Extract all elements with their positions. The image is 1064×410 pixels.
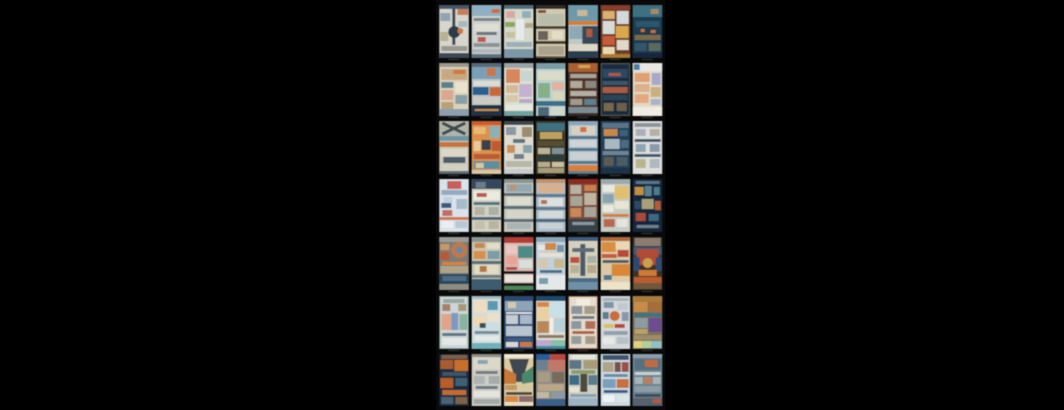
thumbnail r7c3: cream funnel poster bbox=[504, 354, 534, 406]
thumbnail r6c5: cream rust framed poster bbox=[568, 296, 598, 351]
thumbnail r2c4: blue-green map poster bbox=[536, 63, 566, 118]
thumbnail r6c7: brown teal purple poster bbox=[633, 296, 662, 351]
thumbnail r1c7: navy poster bbox=[633, 5, 662, 60]
thumbnail r5c7: red blue orange emblem poster bbox=[633, 237, 662, 292]
thumbnail r7c2: light grey map poster bbox=[472, 354, 501, 406]
thumbnail r5c1: circle diagram poster bbox=[439, 237, 469, 292]
thumbnail r2c5: brown sunset poster bbox=[568, 63, 598, 118]
thumbnail r3c3: white with dark header poster bbox=[504, 121, 534, 176]
thumbnail r7c6: white-blue with navy top poster bbox=[601, 354, 630, 406]
thumbnail r5c4: light blue flow poster bbox=[536, 237, 566, 292]
thumbnail r6c4: blue top orange and purple poster bbox=[536, 296, 566, 351]
thumbnail r1c1: dark circle centre poster bbox=[439, 5, 469, 60]
thumbnail r3c1: crossed map poster bbox=[439, 121, 469, 176]
thumbnail r4c1: white-blue with red centre poster bbox=[439, 179, 469, 234]
thumbnail r4c5: rust poster bbox=[568, 179, 598, 234]
thumbnail r7c5: teal and blue base poster bbox=[568, 354, 598, 406]
thumbnail r4c2: navy header poster bbox=[472, 179, 501, 234]
thumbnail r1c6: red framed poster bbox=[601, 5, 630, 60]
thumbnail r4c7: dark navy spotted poster bbox=[633, 179, 662, 234]
thumbnail r3c5: light blue with orange base poster bbox=[568, 121, 598, 176]
thumbnail r2c6: dark navy with sunset bands poster bbox=[601, 63, 630, 118]
thumbnail r2c7: cream peach cells poster bbox=[633, 63, 662, 118]
thumbnail r3c6: navy with orange map poster bbox=[601, 121, 630, 176]
thumbnail r7c4: flag colours poster bbox=[536, 354, 566, 406]
thumbnail r6c6: white with orange hub poster bbox=[601, 296, 630, 351]
thumbnail r4c4: blue-grey with orange top poster bbox=[536, 179, 566, 234]
thumbnail r3c4: dark olive framed poster bbox=[536, 121, 566, 176]
thumbnail r4c3: grey-cream bands poster bbox=[504, 179, 534, 234]
thumbnail r6c2: pale blue and peach map poster bbox=[472, 296, 501, 351]
thumbnail r3c7: white with blue cells poster bbox=[633, 121, 662, 176]
thumbnail r1c3: pale cells poster bbox=[504, 5, 534, 60]
thumbnail r1c4: cream with dark bands poster bbox=[536, 5, 566, 60]
thumbnail r1c2: map and grey bands poster bbox=[472, 5, 501, 60]
thumbnail r2c1: cream tan map poster bbox=[439, 63, 469, 118]
thumbnail r3c2: orange poster bbox=[472, 121, 501, 176]
thumbnail r5c3: pink and black poster bbox=[504, 237, 534, 292]
thumbnail r7c7: grey-blue with orange poster bbox=[633, 354, 662, 406]
thumbnail r5c6: orange and red map poster bbox=[601, 237, 630, 292]
thumbnail r5c2: cream and blue-grey base poster bbox=[472, 237, 501, 292]
thumbnail r6c1: teal framed flow poster bbox=[439, 296, 469, 351]
thumbnail r6c3: blue framed poster bbox=[504, 296, 534, 351]
thumbnail r5c5: cream with dark cross poster bbox=[568, 237, 598, 292]
thumbnail r2c2: blue with dark base poster bbox=[472, 63, 501, 118]
thumbnail r7c1: dark with orange poster bbox=[439, 354, 469, 406]
thumbnail r1c5: teal map and orange band poster bbox=[568, 5, 598, 60]
thumbnail r4c6: yellow map poster bbox=[601, 179, 630, 234]
thumbnail r2c3: pale purple cells poster bbox=[504, 63, 534, 118]
